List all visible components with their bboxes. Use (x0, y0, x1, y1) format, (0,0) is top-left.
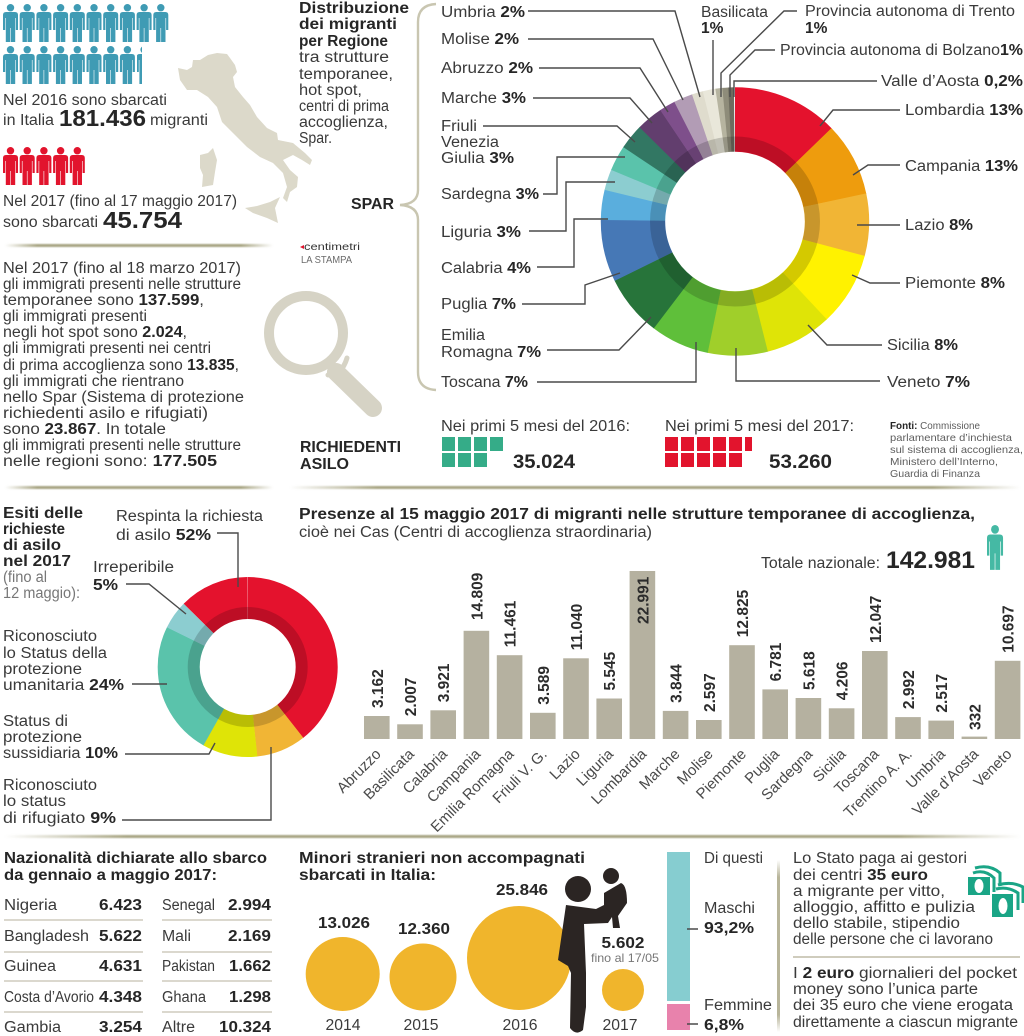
text: 35 euro: a migrante per vitto, (793, 883, 945, 900)
labels: left regions: Molise 2% (441, 31, 519, 48)
labels: outcomes: di asilo 52% (116, 527, 211, 544)
panel: unaccompanied minors: Minori stranieri non accompagnati (299, 850, 585, 867)
text: 2017 arrivals: sono sbarcati (3, 214, 98, 231)
bar chart: regional presences: 5.618 (801, 651, 818, 690)
sources: Guardia di Finanza (890, 468, 980, 480)
labels: right regions: Veneto 7% (887, 374, 970, 391)
panel: nationalities: 1.662 (229, 958, 271, 975)
panel: nationalities: Costa d’Avorio (4, 989, 94, 1006)
labels: right regions: Lombardia 13% (905, 102, 1023, 119)
text: 35 euro: Lo Stato paga ai gestori (793, 850, 967, 867)
text: structures presence: nelle regioni sono: 177.505 (3, 453, 217, 470)
text: structures presence: gli immigrati presenti (3, 308, 147, 325)
bar chart: regional presences: Emilia Romagna (428, 745, 518, 836)
bar chart: regional presences: Lazio (546, 746, 584, 783)
labels: outcomes: Status di (3, 713, 68, 730)
panel: unaccompanied minors: sbarcati in Italia: (299, 867, 436, 884)
labels: outcomes (3, 508, 263, 827)
labels: left regions: Giulia 3% (441, 150, 514, 167)
labels: outcomes: protezione (3, 729, 82, 746)
bar chart: regional presences: Veneto (970, 746, 1015, 791)
text: 2 euro: dei 35 euro che viene erogata (793, 997, 1013, 1014)
leader lines: outcomes (122, 533, 271, 820)
panel: unaccompanied minors: 2014 (326, 1017, 361, 1034)
panel: asylum seekers: Nei primi 5 mesi del 2017: (665, 418, 854, 435)
title: distribution: tra strutture (299, 49, 389, 66)
bar chart: regional presences: Calabria (399, 745, 451, 797)
credit: centimetri La Stampa: LA STAMPA (301, 255, 352, 266)
panel: nationalities: Nazionalità dichiarate allo sbarco (4, 850, 267, 867)
panel: nationalities: 2.994 (228, 897, 271, 914)
panel: unaccompanied minors: 2017 (602, 1017, 638, 1034)
divider decoration (5, 835, 1020, 838)
sources: Fonti: Commissione (890, 420, 980, 432)
text: 2017 arrivals: 45.754 (103, 207, 182, 233)
icon: magnifying glass (269, 296, 373, 408)
bar chart: regional presences: 6.781 (768, 642, 785, 681)
text: structures presence: nello Spar (Sistema di protezione (3, 389, 244, 406)
labels: outcomes: di rifugiato 9% (3, 810, 116, 827)
stacked bar: gender: 93,2% (704, 920, 754, 937)
labels: left regions: Emilia (441, 327, 485, 344)
labels: right regions: 1% (701, 20, 724, 37)
panel: nationalities: 3.254 (99, 1019, 142, 1036)
bar chart: regional presences: 12.825 (735, 589, 752, 637)
text: 2016 arrivals: Nel 2016 sono sbarcati (3, 92, 167, 109)
text: structures presence: sono 23.867 . In totale (3, 421, 166, 438)
labels: outcomes: protezione (3, 661, 82, 678)
panel: unaccompanied minors: 5.602 (602, 935, 645, 952)
heading: presences in CAS: cioè nei Cas (Centri di accoglienza straordinaria) (299, 524, 652, 541)
bar chart: regional presences: Puglia (742, 745, 783, 787)
bar chart: regional presences: Marche (636, 746, 683, 793)
brace (400, 4, 436, 390)
labels: right regions: Basilicata (701, 4, 768, 21)
bar chart: regional presences: Sardegna (758, 745, 817, 804)
bar chart: regional presences: 332 (967, 704, 984, 730)
bar chart: regional presences: 11.461 (503, 600, 520, 647)
sources: sul sistema di accoglienza, (890, 444, 1023, 456)
text: 35 euro: dello stabile, stipendio (793, 915, 960, 932)
labels: outcomes: Irreperibile (93, 559, 174, 576)
leader lines: regions (483, 11, 900, 382)
labels: left regions: Liguria 3% (441, 224, 521, 241)
panel: nationalities: 2.169 (228, 928, 271, 945)
credit: centimetri La Stampa (300, 241, 360, 266)
text: structures presence: richiedenti asilo e rifugiati) (3, 405, 208, 422)
labels: left regions: Puglia 7% (441, 296, 516, 313)
labels: left regions: Umbria 2% (441, 4, 525, 21)
stacked bar: gender: Maschi (704, 900, 755, 917)
panel: unaccompanied minors: 25.846 (496, 882, 548, 899)
labels: outcomes: Riconosciuto (3, 628, 97, 645)
stacked bar: gender: Femmine (704, 997, 772, 1014)
panel: nationalities: Mali (162, 928, 191, 945)
stacked bar: gender: 6,8% (704, 1017, 744, 1034)
text: 2 euro: direttamente a ciascun migrante (793, 1014, 1018, 1031)
panel: nationalities: Nigeria (4, 897, 57, 914)
panel: nationalities: 10.324 (219, 1019, 271, 1036)
panel: nationalities: 1.298 (229, 989, 271, 1006)
text: 2016 arrivals: migranti (150, 112, 208, 129)
title: distribution: per Regione (299, 33, 388, 50)
labels: outcomes: Riconosciuto (3, 777, 97, 794)
text: 2016 arrivals (3, 92, 208, 131)
bar chart: regional presences: 12.047 (868, 596, 885, 643)
bar chart: regional presences: 2.007 (403, 678, 420, 716)
stacked bar: gender (667, 850, 772, 1034)
text: 2016 arrivals: 181.436 (59, 105, 146, 131)
stacked bar: gender: Di questi (704, 850, 763, 867)
title: distribution: hot spot, (299, 82, 362, 99)
labels: right regions: Provincia autonoma di Bolzano 1% (780, 42, 1023, 59)
bar chart: regional presences: Molise (674, 746, 717, 788)
panel: nationalities: Ghana (162, 989, 206, 1006)
labels: right regions: 1% (805, 20, 828, 37)
heading: asylum outcomes: (fino al (3, 569, 47, 586)
text: structures presence: Nel 2017 (fino al 18 marzo 2017) (3, 260, 241, 277)
text: 35 euro (793, 850, 993, 948)
text: 35 euro: delle persone che ci lavorano (793, 931, 993, 948)
bar chart: regional presences: Sicilia (810, 745, 850, 786)
icons: 2017 arrivals people (3, 147, 85, 185)
divider decoration (793, 956, 1020, 958)
panel: nationalities: Gambia (4, 1019, 61, 1036)
bar chart: regional presences: Trentino A. A. (841, 746, 916, 821)
text: 35 euro: dei centri 35 euro (793, 867, 928, 884)
labels: outcomes: sussidiaria 10% (3, 745, 118, 762)
labels: outcomes: 5% (93, 577, 118, 594)
bar chart: regional presences: 3.162 (370, 669, 387, 708)
panel: unaccompanied minors: 13.026 (318, 915, 370, 932)
labels: left regions: Sardegna 3% (441, 186, 539, 203)
labels: left regions: Friuli (441, 118, 477, 135)
title: distribution (299, 0, 409, 147)
labels: right regions: Provincia autonoma di Trento (805, 3, 1015, 20)
labels: right regions (701, 3, 1023, 391)
panel: unaccompanied minors: fino al 17/05 (591, 951, 659, 965)
title: distribution: centri di prima (299, 98, 389, 115)
heading: asylum outcomes (3, 505, 83, 602)
icon: person (987, 525, 1003, 570)
bar chart: regional presences: 2.992 (901, 670, 918, 709)
panel: unaccompanied minors (299, 850, 659, 1034)
heading: asylum outcomes: 12 maggio): (3, 585, 80, 602)
text: 2017 arrivals (3, 193, 237, 233)
panel: nationalities: 4.631 (99, 958, 142, 975)
text: structures presence: gli immigrati presenti nelle strutture (3, 276, 241, 293)
bar chart: regional presences: Umbria (903, 745, 949, 792)
sources: Ministero dell’Interno, (890, 456, 998, 468)
text: 2 euro: money sono l’unica parte (793, 981, 978, 998)
text: structures presence (3, 260, 244, 470)
sources (890, 420, 1023, 480)
title: distribution: Distribuzione (299, 0, 409, 17)
donut chart: distribution by region (633, 120, 837, 324)
labels: right regions: Piemonte 8% (905, 275, 1005, 292)
heading: asylum outcomes: Esiti delle (3, 505, 83, 522)
icon: banknotes (968, 867, 1023, 917)
bar chart: regional presences: Lombardia (588, 745, 651, 808)
bar chart: regional presences: 2.517 (934, 674, 951, 713)
map of Italy (178, 53, 312, 223)
bar chart: regional presences: 5.545 (602, 651, 619, 690)
national total: 142.981 (886, 547, 975, 574)
heading: asylum outcomes: richieste (3, 521, 65, 538)
panel: nationalities: Senegal (162, 897, 215, 914)
labels: left regions: Marche 3% (441, 90, 526, 107)
label: SPAR: SPAR (351, 196, 394, 213)
heading: asylum outcomes: di asilo (3, 537, 61, 554)
panel: nationalities: da gennaio a maggio 2017: (4, 867, 217, 884)
bar chart: regional presences: 4.206 (835, 661, 852, 700)
panel: asylum seekers: 53.260 (769, 452, 832, 473)
bar chart: regional presences: 14.809 (469, 572, 486, 620)
divider decoration (777, 860, 780, 1032)
labels: left regions: Abruzzo 2% (441, 60, 533, 77)
panel: asylum seekers: 35.024 (513, 452, 575, 473)
panel: unaccompanied minors: 2016 (502, 1017, 538, 1034)
labels: right regions: Campania 13% (905, 158, 1018, 175)
labels: left regions: Romagna 7% (441, 344, 541, 361)
text: structures presence: gli immigrati presenti nei centri (3, 340, 211, 357)
text: 2 euro (793, 965, 1018, 1031)
panel: asylum seekers: ASILO (300, 456, 349, 473)
text: 35 euro: alloggio, affitto e pulizia (793, 899, 975, 916)
panel: nationalities: Bangladesh (4, 928, 89, 945)
labels: outcomes: umanitaria 24% (3, 677, 124, 694)
bar chart: regional presences: 3.921 (436, 663, 453, 702)
panel: nationalities: Altre (162, 1019, 195, 1036)
sources: parlamentare d’inchiesta (890, 432, 1012, 444)
labels: left regions: Toscana 7% (441, 374, 528, 391)
bar chart: regional presences (334, 571, 1020, 836)
bar chart: regional presences: 3.844 (669, 664, 686, 703)
bar chart: regional presences: 11.040 (569, 604, 586, 650)
title: distribution: Spar. (299, 130, 332, 147)
bar chart: regional presences: 2.597 (702, 673, 719, 712)
labels: outcomes: Respinta la richiesta (116, 508, 263, 525)
bar chart: regional presences: Liguria (573, 745, 617, 790)
bar chart: regional presences: 10.697 (1001, 605, 1018, 653)
text: structures presence: gli immigrati che rientrano (3, 373, 184, 390)
text: 2 euro: I 2 euro giornalieri del pocket (793, 965, 1018, 982)
labels: right regions: Valle d’Aosta 0,2% (881, 73, 1023, 90)
bar chart: regional presences: Piemonte (693, 746, 750, 803)
labels: left regions: Venezia (441, 134, 499, 151)
national total: Totale nazionale: (761, 555, 880, 572)
labels: right regions: Sicilia 8% (887, 337, 958, 354)
text: structures presence: negli hot spot sono 2.024, (3, 324, 187, 341)
national total (761, 547, 975, 574)
bar chart: regional presences: 3.589 (536, 666, 553, 705)
title: distribution: dei migranti (299, 16, 397, 33)
title: distribution: temporanee, (299, 66, 393, 83)
panel: nationalities: 4.348 (99, 989, 142, 1006)
labels: left regions (441, 4, 541, 391)
donut chart: asylum outcomes (179, 598, 317, 736)
heading: presences in CAS (299, 506, 975, 541)
labels: right regions: Lazio 8% (905, 217, 973, 234)
text: 2017 arrivals: Nel 2017 (fino al 17 maggio 2017) (3, 193, 237, 210)
text: structures presence: gli immigrati presenti nelle strutture (3, 437, 241, 454)
labels: outcomes: lo Status della (3, 645, 107, 662)
labels: outcomes: lo status (3, 793, 66, 810)
panel: unaccompanied minors: 2015 (404, 1017, 438, 1034)
heading: asylum outcomes: nel 2017 (3, 553, 71, 570)
credit: centimetri La Stampa: centimetri (304, 241, 360, 253)
bar chart: regional presences: Abruzzo (334, 746, 385, 797)
labels: left regions: Calabria 4% (441, 260, 531, 277)
bar chart: regional presences: Valle d’Aosta (909, 745, 983, 819)
panel: asylum seekers: RICHIEDENTI (300, 439, 401, 456)
icons: 2016 arrivals people (3, 4, 168, 84)
panel: asylum seekers: Nei primi 5 mesi del 2016: (441, 418, 630, 435)
bar chart: regional presences: 22.991 (635, 576, 652, 624)
panel: unaccompanied minors: 12.360 (398, 921, 450, 938)
text: structures presence: temporanee sono 137.599 , (3, 292, 204, 309)
panel: nationalities (4, 850, 272, 1036)
panel: nationalities: Guinea (4, 958, 56, 975)
text: 2016 arrivals: in Italia (3, 112, 54, 129)
bar chart: regional presences: Toscana (831, 745, 883, 797)
bar chart: regional presences: Campania (424, 745, 485, 806)
panel: nationalities: Pakistan (162, 958, 215, 975)
icon: adult lifting child (558, 868, 627, 1033)
bar chart: regional presences: Basilicata (360, 745, 418, 803)
bar chart: regional presences: Friuli V. G. (489, 746, 551, 807)
panel: asylum seekers (300, 418, 854, 473)
title: distribution: accoglienza, (299, 114, 388, 131)
divider decoration (5, 486, 273, 489)
heading: presences in CAS: Presenze al 15 maggio 2017 di migranti nelle strutture temporanee di accoglienza, (299, 506, 975, 523)
panel: nationalities: 6.423 (99, 897, 142, 914)
text: structures presence: di prima accoglienza sono 13.835, (3, 357, 239, 374)
panel: nationalities: 5.622 (99, 928, 142, 945)
divider decoration (5, 244, 273, 247)
